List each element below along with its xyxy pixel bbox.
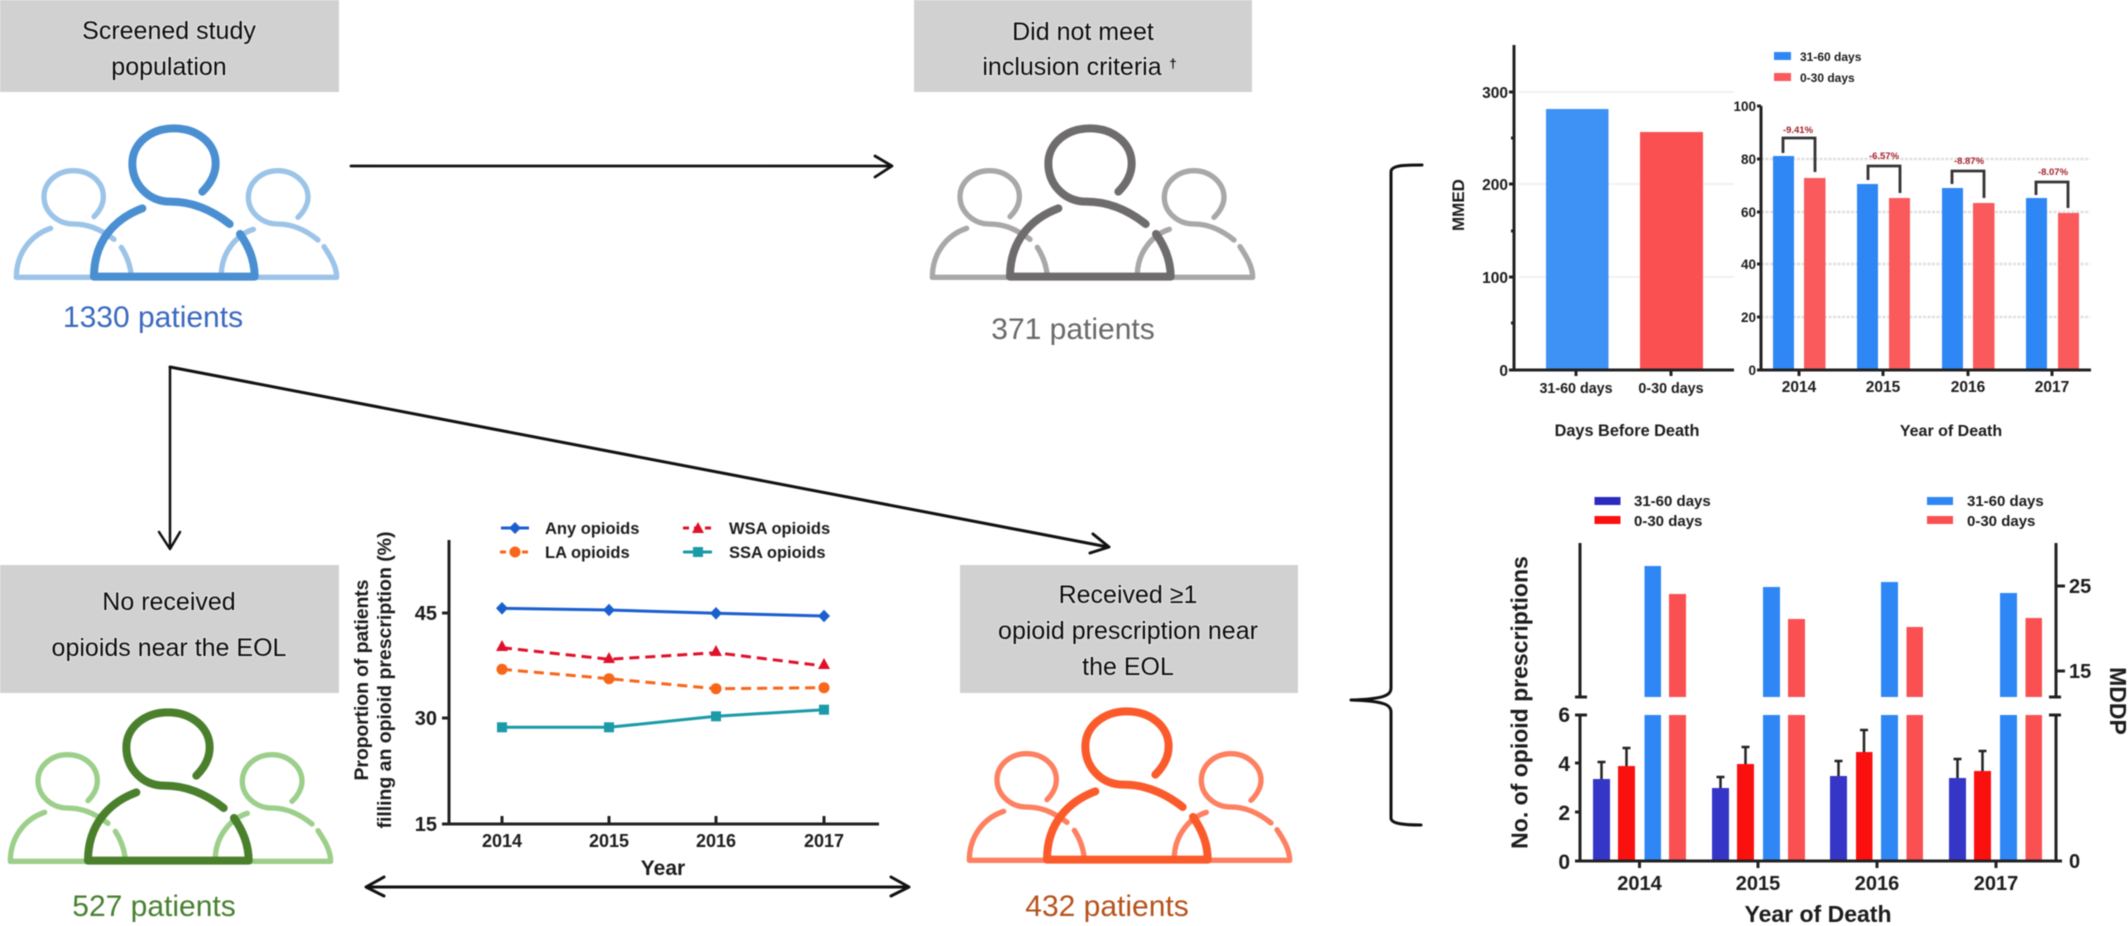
heading: did not meet inclusion criteria: † (1169, 56, 1177, 71)
legend: prescriptions: 0-30 days (1634, 513, 1702, 530)
axes (1757, 106, 2091, 376)
x axis labels: 2014 (1617, 873, 1663, 895)
x axis labels: 2017 (1974, 873, 2018, 895)
patient count: 371: 371 patients (991, 313, 1155, 346)
patient count: 432: 432 patients (1025, 890, 1189, 923)
icon: gray group of people (932, 128, 1253, 277)
x axis title: Year of Death (1900, 423, 2002, 440)
right axis labels (2069, 576, 2091, 873)
right axis labels: 25 (2069, 576, 2091, 598)
x axis labels: 2017 (804, 831, 844, 851)
percent change labels: -8.07% (2038, 167, 2069, 178)
heading: screened study population: Screened study (82, 17, 256, 45)
x axis labels: 2014 (482, 831, 522, 851)
bars: 31-60 days (1773, 156, 2047, 370)
heading: did not meet inclusion criteria: inclusion criteria (982, 53, 1162, 81)
arrow: two-headed comparison (366, 877, 909, 896)
left axis labels (1558, 704, 1570, 874)
arrow: screened to no opioids (159, 367, 180, 549)
y axis title: Proportion of patients (351, 579, 373, 780)
axes (1575, 543, 2065, 868)
heading: did not meet inclusion criteria: Did not meet (1012, 18, 1154, 46)
legend: prescriptions (1594, 493, 1711, 530)
axes (442, 540, 879, 824)
legend (1774, 50, 1862, 85)
icon: blue group of people (16, 128, 337, 277)
y axis labels: 60 (1741, 205, 1756, 220)
legend: 0-30 days (1800, 71, 1855, 85)
heading: received opioid prescription: Received ≥1 (1059, 581, 1197, 609)
y axis labels (415, 603, 437, 836)
icon: orange group of people (969, 711, 1290, 860)
panel: did not meet inclusion criteria (914, 0, 1253, 346)
patient count: 527: 527 patients (72, 890, 236, 923)
arrow: screened to excluded (351, 156, 892, 177)
patient count: 1330: 1330 patients (63, 301, 243, 334)
y axis labels: 45 (415, 603, 437, 625)
heading: screened study population: population (111, 53, 227, 81)
legend: SSA opioids (729, 544, 826, 562)
y axis labels: 100 (1733, 99, 1756, 114)
bar: 0-30 days (1640, 132, 1703, 370)
series: SSA opioids (497, 705, 829, 732)
panel: no received opioids near the EOL (0, 565, 339, 923)
left axis title: No. of opioid prescriptions (1506, 556, 1532, 849)
icon: green group of people (10, 712, 331, 861)
heading: no received opioids: opioids near the EOL (52, 634, 287, 662)
x axis labels: 0-30 days (1638, 381, 1704, 397)
comparison brackets (1783, 138, 2068, 208)
y axis labels (1733, 99, 1756, 378)
x axis title: Year (641, 857, 685, 880)
percent change labels: -6.57% (1869, 151, 1900, 162)
percent change labels: -8.87% (1954, 156, 1985, 167)
y axis labels: 0 (1748, 363, 1756, 378)
y axis labels: 40 (1741, 257, 1756, 272)
legend: MDDP: 31-60 days (1967, 493, 2044, 510)
legend (500, 520, 830, 562)
y axis labels (1482, 85, 1508, 380)
x axis labels: 2016 (1855, 873, 1899, 895)
arrow: screened to received opioids (170, 367, 1109, 553)
heading: received opioid prescription (960, 565, 1298, 693)
bracket (1351, 165, 1422, 825)
left axis labels: 2 (1558, 802, 1570, 825)
bar chart: opioid prescriptions and MDDP (1506, 493, 2128, 926)
error bars (1598, 730, 1986, 788)
heading: no received opioids (0, 565, 339, 693)
y axis title second line: filling an opioid prescription (%) (374, 532, 396, 828)
y axis labels: 200 (1482, 177, 1508, 194)
heading: did not meet inclusion criteria (914, 0, 1252, 92)
left axis labels: 4 (1558, 753, 1570, 776)
bars: MDDP 0-30 days (1669, 594, 2042, 861)
bar chart: MMED by days before death (1449, 45, 1734, 440)
heading: received opioid prescription: the EOL (1082, 653, 1174, 681)
x axis labels: 2017 (2035, 379, 2069, 396)
y axis labels: 20 (1741, 310, 1756, 325)
panel: received opioid prescription near the EOL (960, 565, 1298, 923)
x axis labels: 2016 (696, 831, 736, 851)
left axis labels: 0 (1558, 851, 1570, 874)
line chart: proportion of patients filling an opioid prescription (351, 520, 879, 880)
heading: no received opioids: No received (102, 588, 236, 616)
x axis labels: 2015 (589, 831, 629, 851)
legend: prescriptions: 31-60 days (1634, 493, 1711, 510)
legend: MDDP: 0-30 days (1967, 513, 2035, 530)
legend: MDDP (1927, 493, 2044, 530)
y axis labels: 30 (415, 708, 437, 730)
axes (1509, 45, 1734, 376)
y axis title: MMED (1449, 179, 1468, 231)
x axis labels: 31-60 days (1539, 381, 1613, 397)
left axis labels: 6 (1558, 704, 1570, 727)
x axis labels (1782, 379, 2069, 396)
panel: screened study population (0, 0, 339, 334)
y axis labels: 100 (1482, 270, 1508, 287)
series: any opioids (496, 602, 830, 622)
right axis labels: 0 (2069, 851, 2080, 873)
percent change labels: -9.41% (1783, 125, 1814, 136)
x axis labels: 2015 (1736, 873, 1780, 895)
bars: 0-30 days (1804, 178, 2079, 370)
heading: received opioid prescription: opioid prescription near (998, 617, 1258, 645)
x axis labels (1617, 873, 2018, 895)
series: WSA opioids (496, 640, 830, 669)
legend: WSA opioids (729, 520, 830, 538)
x axis labels (1539, 381, 1704, 397)
x axis labels: 2015 (1866, 379, 1901, 396)
legend: 31-60 days (1800, 50, 1862, 64)
legend: LA opioids (545, 544, 630, 562)
right axis labels: 15 (2069, 661, 2091, 683)
x axis title: Days Before Death (1555, 422, 1699, 440)
x axis labels (482, 831, 844, 851)
gridlines (1519, 92, 1734, 277)
series: LA opioids (496, 664, 830, 694)
percent change labels (1783, 125, 2069, 178)
x axis labels: 2016 (1951, 379, 1986, 396)
gridlines (1761, 159, 2090, 317)
bar chart: MMED by year of death (1733, 50, 2091, 440)
bars: prescriptions 0-30 days (1618, 752, 1991, 861)
y axis labels: 0 (1499, 363, 1508, 380)
y axis labels: 15 (415, 814, 437, 836)
bar: 31-60 days (1546, 109, 1608, 370)
legend: Any opioids (545, 520, 639, 538)
x axis labels: 2014 (1782, 379, 1817, 396)
heading: screened study population (0, 0, 339, 92)
y axis labels: 300 (1482, 85, 1508, 102)
bars: MDDP 31-60 days (1644, 566, 2017, 861)
bars: prescriptions 31-60 days (1593, 776, 1966, 861)
y axis labels: 80 (1741, 152, 1756, 167)
